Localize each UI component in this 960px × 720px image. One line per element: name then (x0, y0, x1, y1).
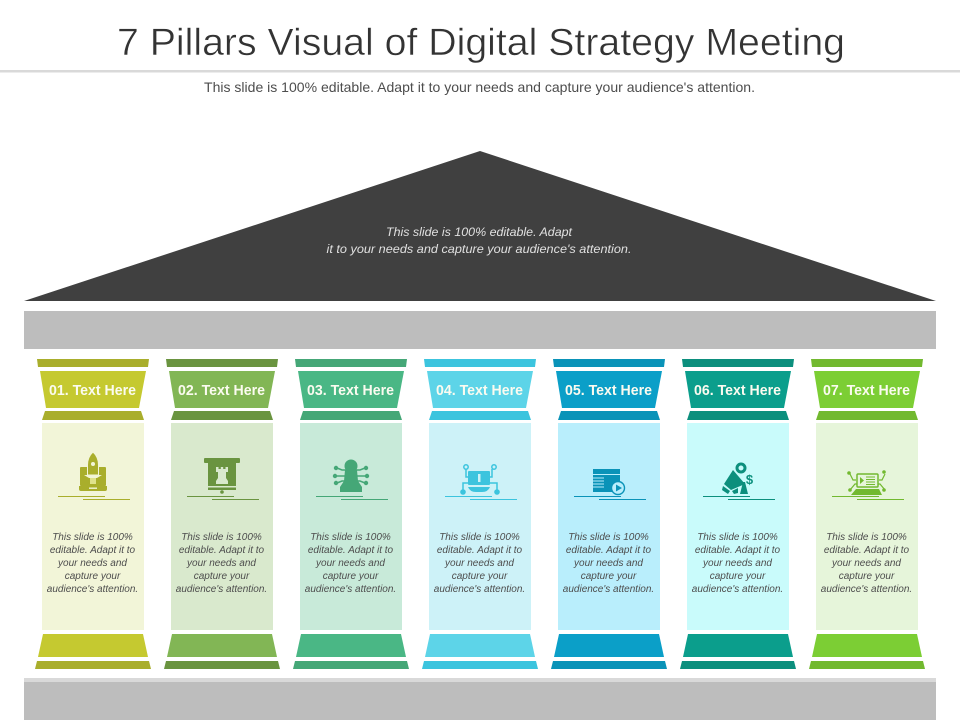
label 03: 03. Text Here (307, 382, 394, 399)
label 07: 07. Text Here (823, 382, 910, 399)
body text: This slide is 100% (697, 532, 778, 543)
body text: editable. Adapt it to (437, 545, 523, 556)
pillar 5 (551, 359, 667, 669)
body text: audience's attention. (176, 584, 267, 595)
body text: capture your (710, 571, 766, 582)
divider lines (703, 496, 775, 500)
icon: megaphone with gear and dollar: $ (746, 472, 754, 487)
label 02: 02. Text Here (178, 382, 265, 399)
body text: your needs and (831, 558, 901, 569)
pillar 4 (422, 359, 538, 669)
body text: This slide is 100% (181, 532, 262, 543)
label 04: 04. Text Here (436, 382, 523, 399)
body text: your needs and (702, 558, 772, 569)
divider lines (316, 496, 388, 500)
divider lines (832, 496, 904, 500)
body text: your needs and (573, 558, 643, 569)
body text: editable. Adapt it to (179, 545, 265, 556)
roof triangle with text: This slide is 100% editable. Adapt (386, 225, 573, 239)
pillar 3 (293, 359, 409, 669)
subtitle: This slide is 100% editable. Adapt it to your needs and capture your audience's attention. (204, 79, 755, 95)
icon: pawn with circuit nodes (333, 460, 369, 492)
body text: audience's attention. (821, 584, 912, 595)
body text: This slide is 100% (439, 532, 520, 543)
body text: audience's attention. (692, 584, 783, 595)
divider lines (445, 496, 517, 500)
body text: your needs and (315, 558, 385, 569)
body text: capture your (839, 571, 895, 582)
body text: your needs and (444, 558, 514, 569)
body text: your needs and (57, 558, 127, 569)
body text: editable. Adapt it to (308, 545, 394, 556)
body text: editable. Adapt it to (50, 545, 136, 556)
body text: audience's attention. (47, 584, 138, 595)
label 06: 06. Text Here (694, 382, 781, 399)
body text: This slide is 100% (826, 532, 907, 543)
divider lines (574, 496, 646, 500)
body text: capture your (581, 571, 637, 582)
label 05: 05. Text Here (565, 382, 652, 399)
icon: rook on presentation board (204, 458, 240, 494)
body text: audience's attention. (305, 584, 396, 595)
body text: capture your (65, 571, 121, 582)
pillar 2 (164, 359, 280, 669)
body text: your needs and (186, 558, 256, 569)
divider lines (58, 496, 130, 500)
body text: editable. Adapt it to (695, 545, 781, 556)
divider lines (187, 496, 259, 500)
icon: megaphone with gear and dollar (722, 464, 754, 494)
body text: capture your (194, 571, 250, 582)
body text: capture your (452, 571, 508, 582)
label 01: 01. Text Here (49, 382, 136, 399)
pillar 7 (809, 359, 925, 669)
roof triangle with text: it to your needs and capture your audience's attention. (326, 242, 632, 256)
base beam (24, 678, 936, 720)
icon: rocket over laptop (79, 452, 107, 491)
icon: browser window with play button (593, 469, 624, 494)
body text: audience's attention. (563, 584, 654, 595)
icon: laptop keyhole circuit (460, 465, 500, 495)
body text: audience's attention. (434, 584, 525, 595)
body text: editable. Adapt it to (824, 545, 910, 556)
body text: This slide is 100% (568, 532, 649, 543)
pillar 6 (680, 359, 796, 669)
body text: This slide is 100% (52, 532, 133, 543)
roof triangle with text (24, 151, 936, 301)
body text: capture your (323, 571, 379, 582)
top beam (24, 311, 936, 349)
title: 7 Pillars Visual of Digital Strategy Meeting (117, 22, 845, 64)
pillar 1 (35, 359, 151, 669)
body text: editable. Adapt it to (566, 545, 652, 556)
icon: laptop with circuit nodes (847, 470, 886, 495)
body text: This slide is 100% (310, 532, 391, 543)
